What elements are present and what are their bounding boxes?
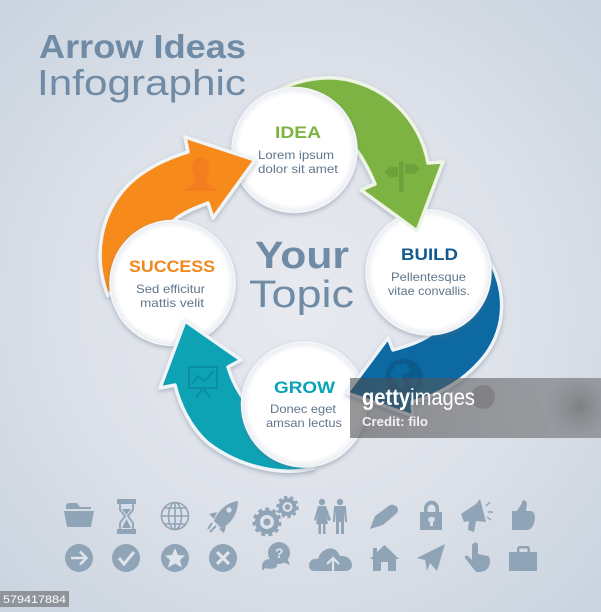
title: Arrow Ideas bbox=[39, 28, 246, 65]
icon: pointing hand bbox=[465, 542, 490, 572]
icon: globe grid bbox=[162, 502, 188, 530]
text: success: Sed efficitur bbox=[136, 282, 205, 296]
icon: check circle bbox=[112, 544, 140, 572]
center text: your topic bbox=[249, 235, 354, 316]
text: grow: Donec eget bbox=[270, 402, 337, 416]
text: success bbox=[136, 282, 205, 310]
text: idea: Lorem ipsum bbox=[258, 148, 334, 162]
center text: your topic: Your bbox=[255, 235, 349, 277]
icon: briefcase bbox=[509, 546, 537, 571]
icon: lock bbox=[420, 501, 442, 530]
icon: globe bbox=[386, 358, 422, 396]
icon: signpost bbox=[384, 161, 420, 192]
watermark credit: Credit: filo bbox=[362, 415, 428, 429]
icon: people bbox=[314, 499, 347, 534]
icon: folder bbox=[64, 503, 94, 527]
center text: your topic: Topic bbox=[249, 274, 354, 316]
icon row 1 bbox=[64, 497, 535, 535]
image id tag bbox=[0, 591, 69, 607]
circle: grow bbox=[242, 342, 366, 467]
icon row 2 bbox=[65, 542, 537, 572]
icon: thumbs up bbox=[512, 500, 535, 530]
heading: idea: IDEA bbox=[275, 124, 321, 142]
circle: idea bbox=[232, 88, 357, 212]
heading: build: BUILD bbox=[401, 246, 458, 264]
text: idea bbox=[258, 148, 339, 176]
image id tag: 579417884 bbox=[3, 594, 66, 606]
title bbox=[37, 28, 246, 103]
title: Infographic bbox=[37, 62, 246, 103]
text: build bbox=[388, 270, 470, 298]
green arrow head over build circle bbox=[392, 202, 429, 233]
text: idea: dolor sit amet bbox=[258, 162, 339, 176]
text: grow bbox=[266, 402, 342, 430]
icon: megaphone bbox=[461, 499, 493, 532]
heading: success: SUCCESS bbox=[129, 258, 215, 276]
icon: question bubbles: ? bbox=[275, 545, 284, 561]
icon: home bbox=[370, 545, 399, 571]
icon: arrow circle bbox=[65, 544, 93, 572]
icon: question bubbles bbox=[262, 542, 290, 571]
circle: success bbox=[110, 220, 235, 346]
icon: presentation chart bbox=[189, 367, 217, 398]
arrow: green bbox=[276, 78, 443, 231]
watermark logo: gettyimages bbox=[362, 384, 475, 410]
arrow: orange bbox=[100, 137, 255, 296]
text: build: Pellentesque bbox=[391, 270, 466, 284]
circle: build bbox=[366, 210, 491, 335]
icon: x circle bbox=[209, 544, 237, 572]
text: build: vitae convallis. bbox=[388, 284, 470, 298]
icon: gears bbox=[254, 497, 298, 535]
icon: hourglass bbox=[117, 499, 136, 534]
icon: paper plane bbox=[417, 544, 445, 571]
icon: person bbox=[184, 158, 217, 191]
arrow: teal bbox=[160, 321, 314, 471]
heading: grow: GROW bbox=[274, 379, 335, 397]
icon: star circle bbox=[161, 544, 189, 572]
icon: pencil bbox=[370, 505, 398, 529]
watermark band bbox=[350, 378, 601, 438]
icon: cloud upload bbox=[309, 548, 352, 571]
text: success: mattis velit bbox=[140, 296, 205, 310]
arrow: blue bbox=[347, 258, 502, 416]
text: grow: amsan lectus bbox=[266, 416, 342, 430]
icon: rocket bbox=[208, 501, 238, 533]
